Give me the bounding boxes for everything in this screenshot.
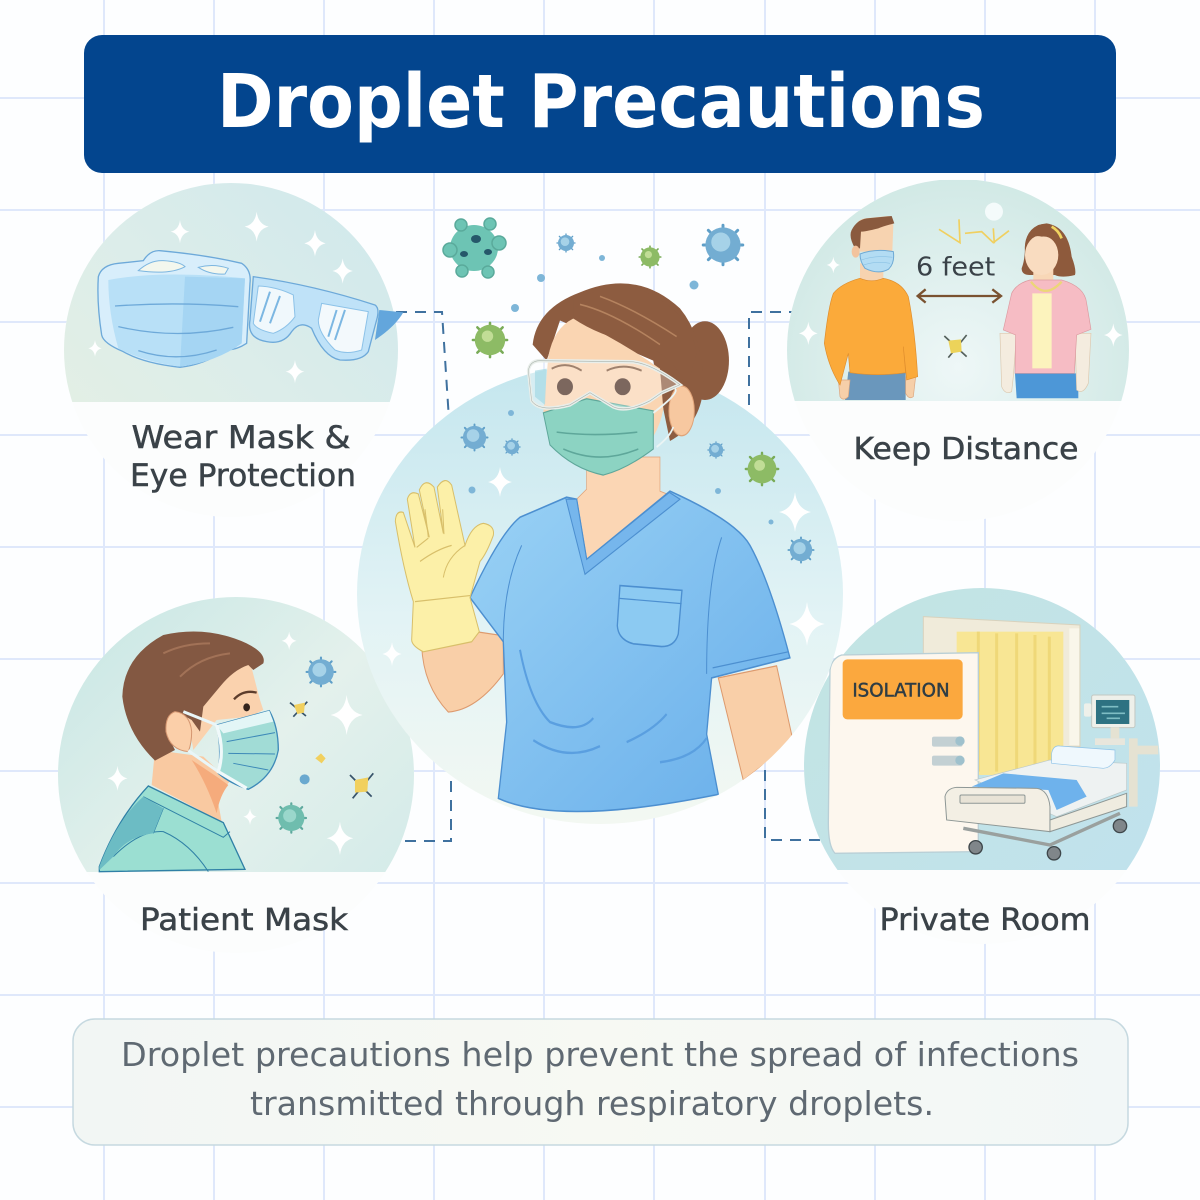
label: wear mask and eye protection: [130, 420, 356, 494]
panel: central nurse: [357, 218, 843, 824]
label: wear mask and eye protection: Eye Protection: [130, 458, 356, 494]
illustration: nurse: [395, 283, 793, 812]
door with isolation sign: ISOLATION: [852, 681, 950, 702]
ear: [669, 386, 694, 436]
icon: safety goggles: [250, 277, 403, 360]
face mask: [543, 389, 676, 475]
panel: wear mask and eye protection: [64, 183, 403, 517]
title banner: [84, 35, 1116, 173]
icon: burst above distance label: [939, 219, 1009, 243]
icon: surgical mask: [98, 251, 250, 367]
dashed connectors: [396, 312, 826, 841]
icon: yellow particles: [290, 702, 373, 798]
door with isolation sign: [828, 653, 978, 853]
callout: summary: transmitted through respiratory droplets.: [250, 1084, 934, 1123]
label: wear mask and eye protection: Wear Mask &: [132, 420, 350, 456]
window and curtain: [923, 617, 1080, 775]
person: man in orange sweater: [824, 216, 918, 400]
panel: patient mask: [58, 597, 414, 953]
illustration: mask and goggles: [88, 212, 403, 383]
neck and chest: [577, 457, 670, 561]
scrub top: [470, 491, 790, 812]
hospital bed: [945, 746, 1127, 860]
patient monitor: [1084, 695, 1158, 807]
label: patient mask: Patient Mask: [140, 903, 349, 938]
hair back and bun: [533, 283, 729, 441]
person: patient in profile: [99, 631, 278, 872]
eyes: [557, 378, 631, 395]
arms: [422, 632, 793, 780]
icon: small blue viruses and droplets: [461, 225, 814, 563]
icon: teal virus: [277, 803, 306, 833]
label: private room: Private Room: [880, 903, 1090, 938]
icon: green viruses: [473, 246, 778, 485]
face: [543, 318, 664, 436]
icon: teal face mask: [183, 711, 278, 789]
panel: private room: [804, 588, 1160, 944]
icon: small particle: [944, 335, 967, 358]
glove: [395, 481, 494, 652]
icon: blue virus: [307, 658, 335, 686]
callout: summary: [73, 1019, 1128, 1145]
safety goggles: [528, 361, 680, 409]
room scene: [828, 617, 1158, 860]
panel: keep distance: [787, 179, 1129, 521]
icon: large teal virus: [443, 218, 506, 278]
title banner: Droplet Precautions: [217, 59, 985, 145]
arrow: distance: [918, 289, 1001, 303]
icon: droplet circle: [985, 203, 1003, 221]
person: woman in pink cardigan: [1000, 223, 1091, 398]
callout: summary: Droplet precautions help prevent the spread of infections: [121, 1035, 1079, 1074]
label: keep distance: Keep Distance: [854, 432, 1078, 467]
label: 6 feet: 6 feet: [916, 252, 995, 282]
